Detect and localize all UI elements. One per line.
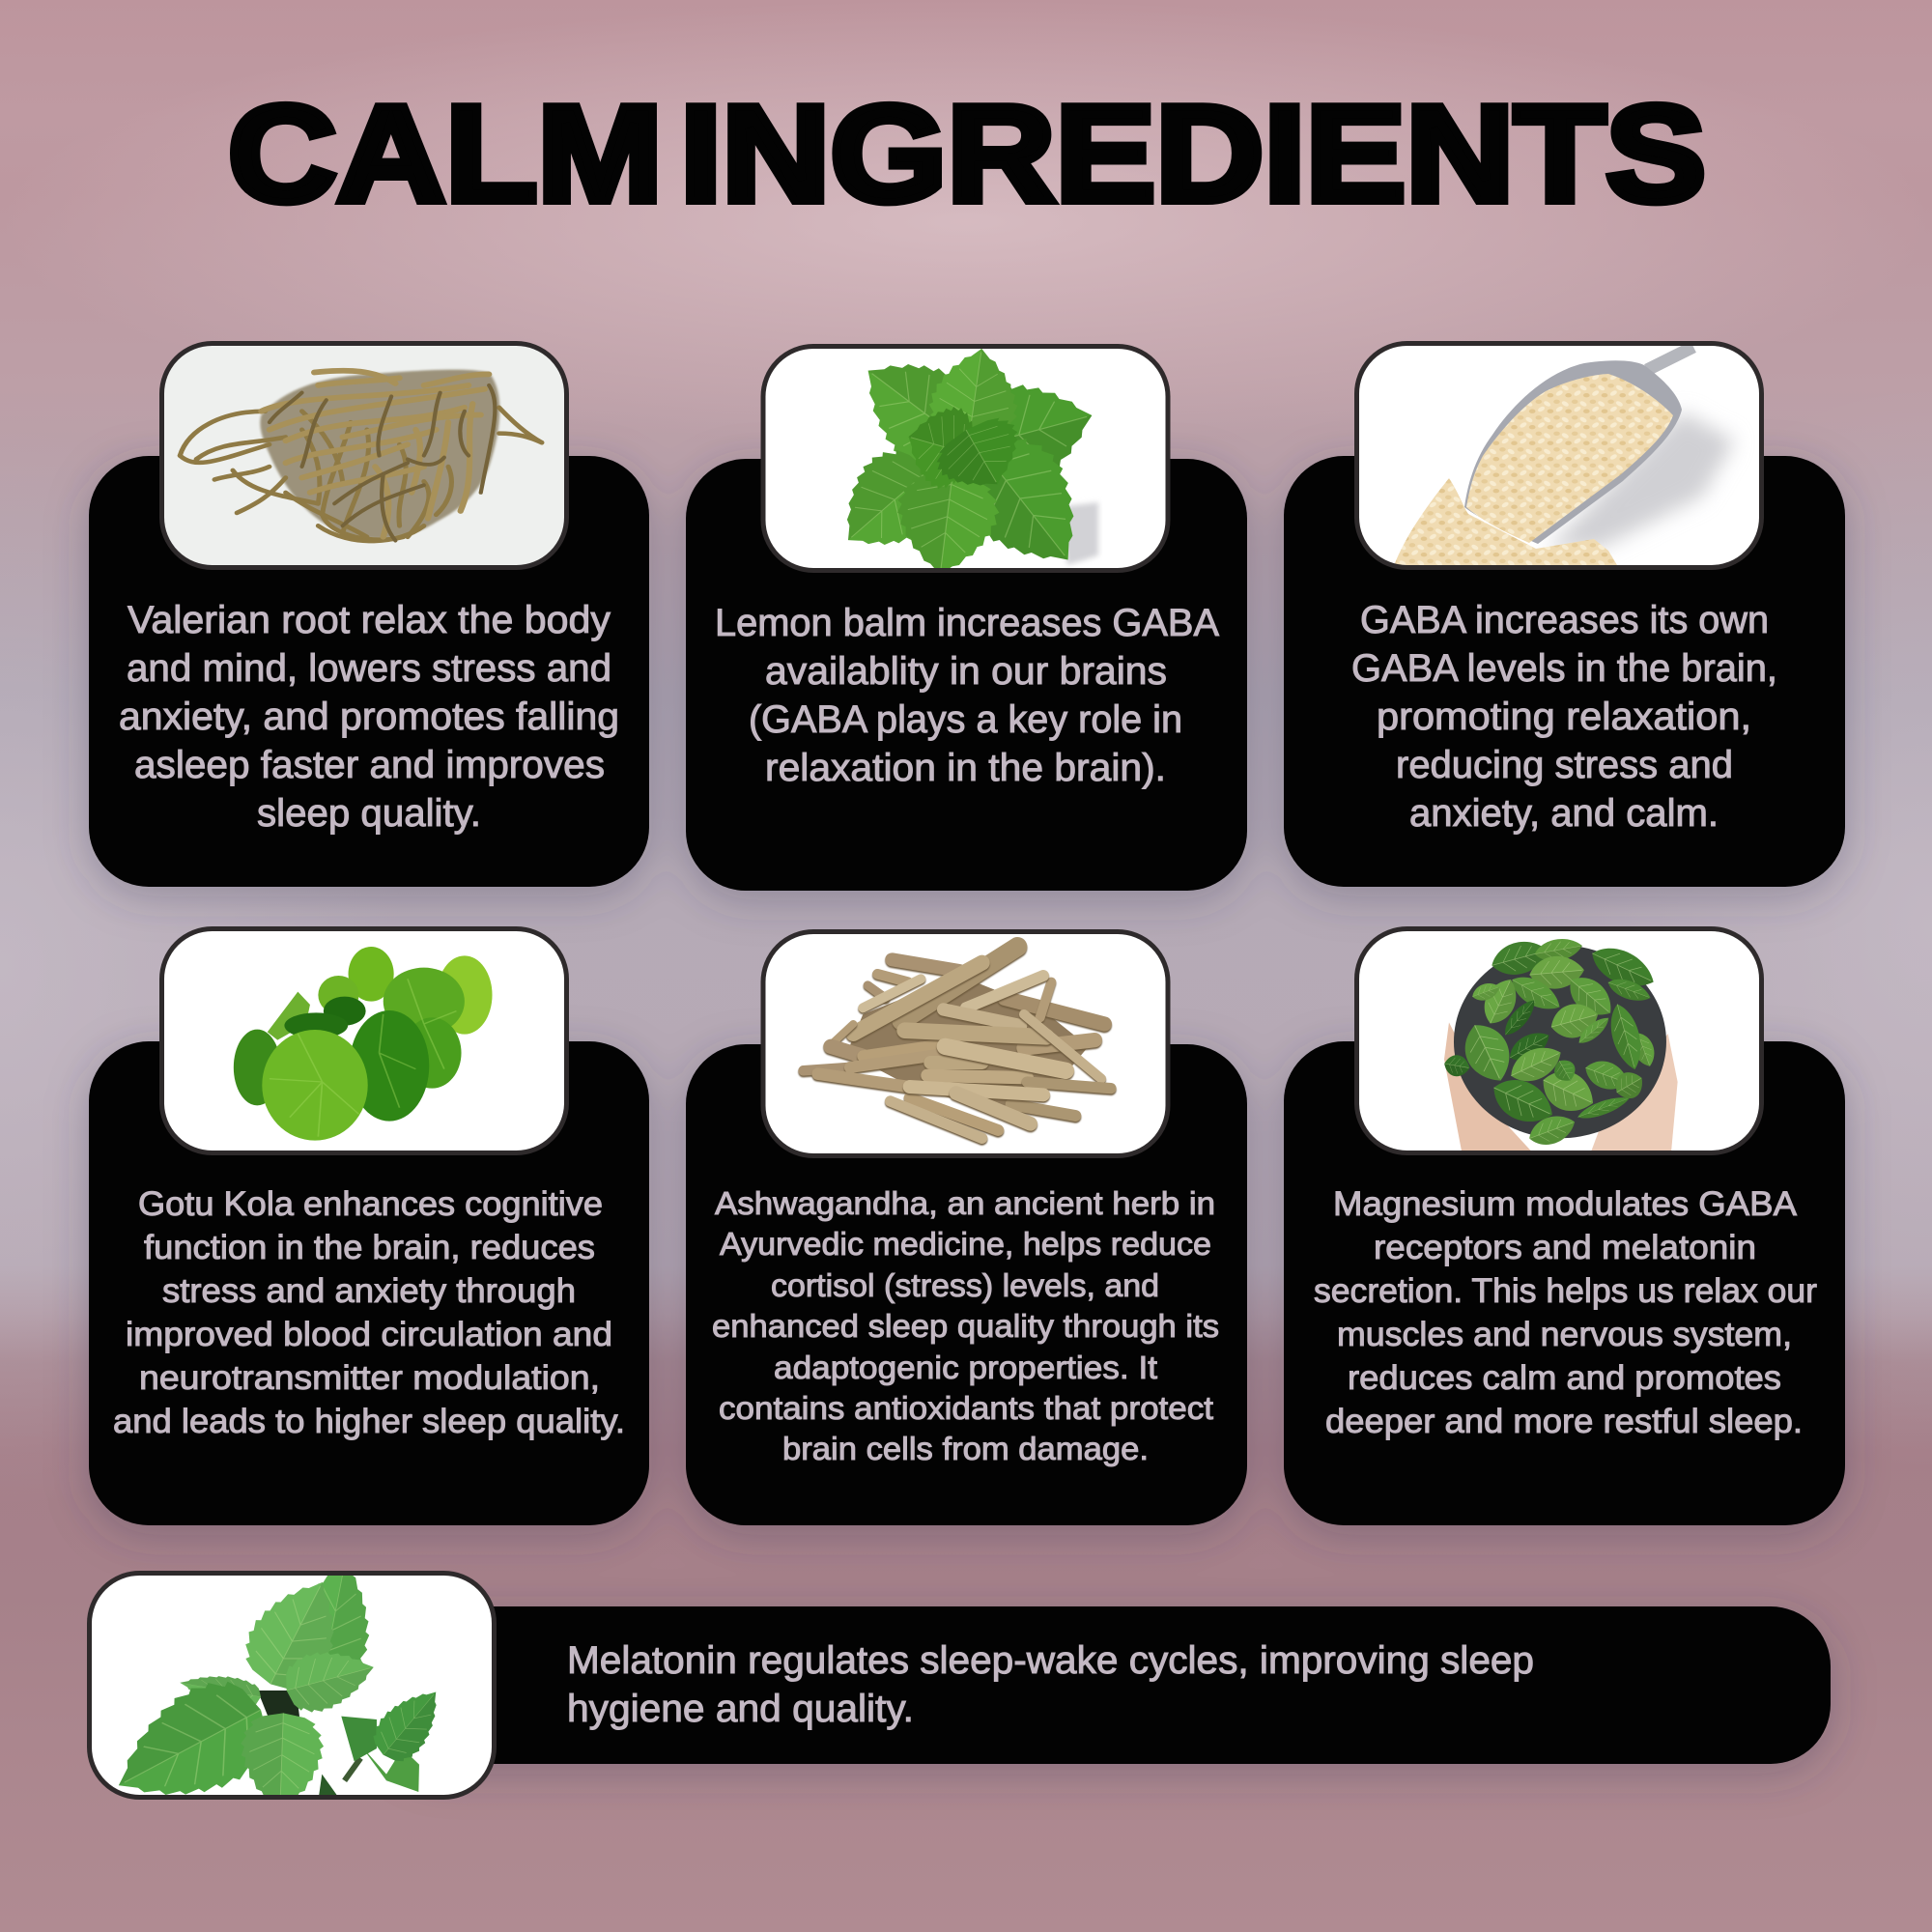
description text: relaxation in the brain). [765,747,1166,789]
description text: stress and anxiety through [162,1272,576,1310]
panel: magnesium [1284,926,1845,1525]
description text: (GABA plays a key role in [749,698,1182,741]
description text: GABA levels in the brain, [1351,647,1777,690]
description text: Valerian root relax the body [128,599,611,641]
description text: availablity in our brains [765,650,1167,693]
description text: function in the brain, reduces [144,1229,595,1266]
panel: ashwagandha [686,929,1247,1525]
description text: asleep faster and improves [134,744,605,786]
card background [1284,1041,1845,1525]
photo: spinach plate in hands [1354,926,1764,1155]
description text: brain cells from damage. [782,1431,1149,1466]
description text [119,599,619,835]
title: INGREDIENTS [680,77,1706,231]
description text: Ashwagandha, an ancient herb in [715,1185,1215,1221]
description text: secretion. This helps us relax our [1314,1272,1817,1310]
description text: adaptogenic properties. It [774,1350,1157,1385]
description text: Gotu Kola enhances cognitive [138,1185,603,1223]
description text [715,602,1219,789]
description text: Ayurvedic medicine, helps reduce [720,1226,1211,1262]
panel: gotu kola [89,926,649,1525]
description text: anxiety, and promotes falling [119,696,619,738]
description text: contains antioxidants that protect [719,1390,1213,1426]
description text: sleep quality. [257,792,481,835]
description text: enhanced sleep quality through its [712,1308,1219,1344]
description text: Melatonin regulates sleep-wake cycles, improving sleep [567,1639,1534,1682]
card background [1284,456,1845,887]
panel: GABA [1284,341,1845,887]
description text [567,1639,1534,1730]
panel: valerian root [89,341,649,887]
panel: melatonin [87,1571,1831,1800]
description text: muscles and nervous system, [1337,1316,1792,1353]
card background [89,456,649,887]
photo: scoop of sesame grains [1354,341,1764,575]
description text [712,1185,1219,1466]
title [228,77,1706,231]
description text: deeper and more restful sleep. [1325,1403,1803,1440]
description text: hygiene and quality. [567,1688,914,1730]
card shadows [89,466,1845,1774]
description text: receptors and melatonin [1374,1229,1756,1266]
photo: ashwagandha root sticks [760,929,1170,1158]
photo: valerian root [159,341,569,570]
description text: neurotransmitter modulation, [139,1359,600,1397]
description text: cortisol (stress) levels, and [771,1267,1159,1303]
description text: Lemon balm increases GABA [715,602,1219,644]
description text: reduces calm and promotes [1348,1359,1781,1397]
description text: GABA increases its own [1360,599,1769,641]
photo: melatonin plant leaves [92,1576,492,1795]
description text: reducing stress and [1396,744,1733,786]
description text: and mind, lowers stress and [127,647,611,690]
description text: Magnesium modulates GABA [1333,1185,1798,1223]
description text: promoting relaxation, [1377,696,1751,738]
card background [686,1044,1247,1525]
panel: lemon balm [686,330,1247,891]
pill background [386,1606,1831,1764]
card background [89,1041,649,1525]
photo: gotu kola leaves [159,926,569,1155]
title: CALM [228,77,663,231]
description text: and leads to higher sleep quality. [113,1403,625,1440]
description text: anxiety, and calm. [1409,792,1719,835]
description text [1351,599,1777,835]
photo: lemon balm leaves [765,349,1165,568]
description text [113,1185,625,1440]
description text: improved blood circulation and [126,1316,612,1353]
card background [686,459,1247,891]
description text [1314,1185,1817,1440]
